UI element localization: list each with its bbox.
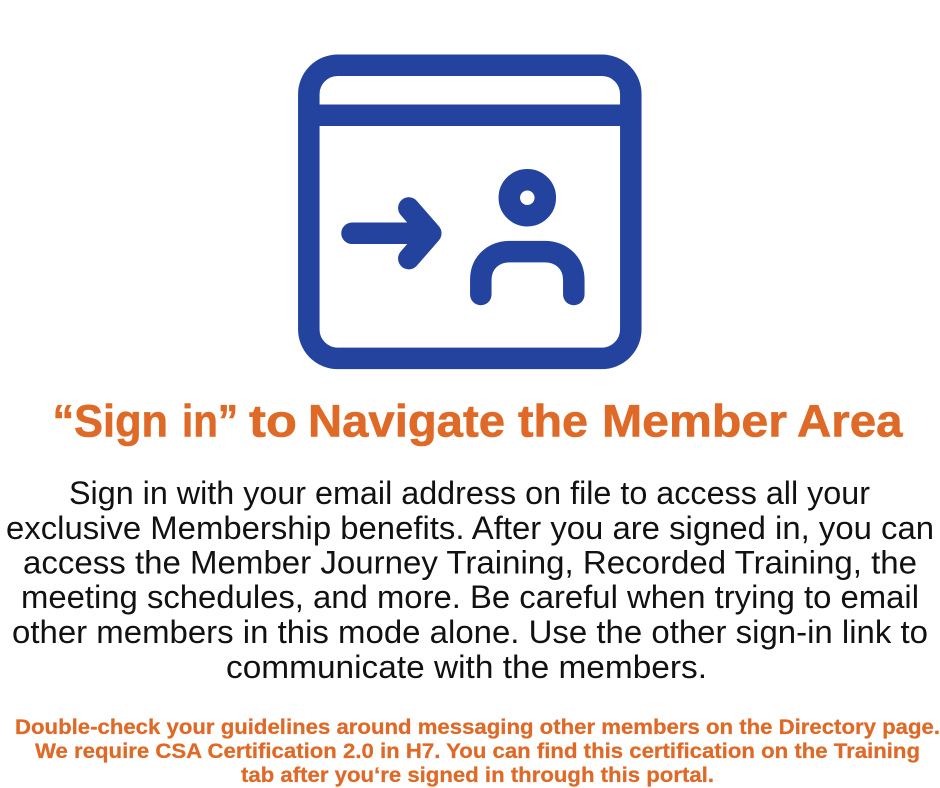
body text: [6, 475, 934, 685]
icon: browser window frame: [309, 65, 631, 358]
callout: certification note: [15, 716, 940, 787]
title: Navigate: [308, 396, 505, 446]
body text: other members in this mode alone. Use the other sign-in link to: [12, 614, 928, 650]
title: to: [249, 396, 297, 446]
body text: communicate with the members.: [226, 649, 707, 685]
title: “Sign: [52, 396, 168, 446]
body text: access the Member Journey Training, Recorded Training, the: [23, 544, 917, 580]
callout: certification note: tab after you‘re signed in through this portal.: [241, 764, 714, 787]
title: in”: [182, 396, 238, 446]
body text: Sign in with your email address on file to access all your: [69, 475, 870, 511]
icon: arrow pointing right: [352, 208, 431, 259]
title: the: [518, 396, 588, 446]
title: Area: [797, 396, 904, 446]
icon: user shoulders: [481, 252, 574, 294]
body text: meeting schedules, and more. Be careful when trying to email: [21, 579, 919, 615]
title: [52, 396, 904, 446]
icon: user head: [509, 180, 545, 216]
title: Member: [602, 396, 787, 446]
callout: certification note: Double-check your guidelines around messaging other members on the Directory page.: [15, 716, 940, 739]
callout: certification note: We require CSA Certification 2.0 in H7. You can find this certification on the Training: [35, 740, 920, 763]
body text: exclusive Membership benefits. After you are signed in, you can: [6, 510, 934, 546]
icon: browser window with sign-in arrow and user: [309, 65, 631, 358]
